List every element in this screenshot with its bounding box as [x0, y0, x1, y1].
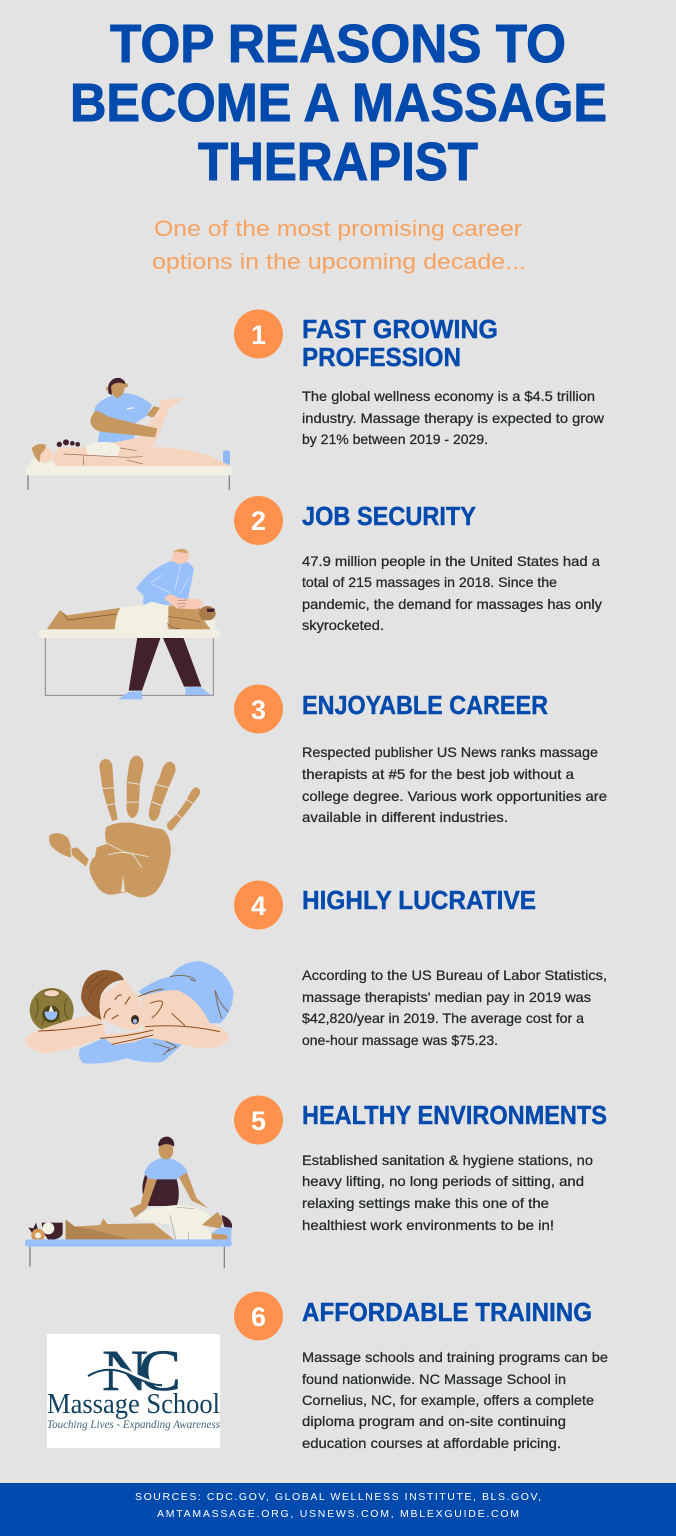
heading: highly lucrative: HIGHLY LUCRATIVE: [302, 887, 536, 915]
number badge 4: 4: [251, 891, 266, 921]
text: reason 4: one-hour massage was $75.23.: [302, 1033, 498, 1048]
number badge 2: 2: [251, 506, 266, 536]
text: reason 4: [302, 968, 607, 1048]
number badge 3: 3: [251, 695, 266, 725]
heading: healthy environments: HEALTHY ENVIRONMENTS: [302, 1102, 607, 1130]
heading: fast growing profession: PROFESSION: [302, 344, 461, 372]
text: reason 3: available in different industries.: [302, 810, 508, 825]
heading: job security: JOB SECURITY: [302, 503, 476, 531]
text: reason 5: healthiest work environments to be in!: [302, 1218, 554, 1233]
text: reason 6: education courses at affordable pricing.: [302, 1436, 561, 1451]
text: reason 5: heavy lifting, no long periods of sitting, and: [302, 1174, 584, 1189]
text: reason 6: Cornelius, NC, for example, offers a complete: [302, 1393, 594, 1408]
title: TOP REASONS TO: [110, 14, 566, 74]
illustration: handprint: [49, 756, 200, 897]
footer: sources: AMTAMASSAGE.ORG, USNEWS.COM, MBLEXGUIDE.COM: [157, 1508, 519, 1520]
text: reason 3: therapists at #5 for the best job without a: [302, 767, 574, 782]
text: reason 6: diploma program and on-site continuing: [302, 1414, 566, 1429]
number badge 4: [234, 880, 283, 930]
text: reason 2: [302, 554, 602, 633]
number badge 3: [234, 684, 283, 734]
illustration: therapist massaging client's back: [25, 1137, 232, 1268]
text: reason 6: [302, 1350, 608, 1451]
footer: sources: SOURCES: CDC.GOV, GLOBAL WELLNESS INSTITUTE, BLS.GOV,: [135, 1491, 541, 1503]
subtitle: [152, 216, 526, 274]
text: reason 5: relaxing settings make this one of the: [302, 1196, 549, 1211]
heading: fast growing profession: [302, 316, 498, 372]
text: reason 2: pandemic, the demand for massages has only: [302, 597, 602, 612]
number badge 2: [234, 496, 283, 545]
number badge 1: [234, 310, 283, 358]
heading: affordable training: AFFORDABLE TRAINING: [302, 1299, 592, 1327]
illustration: therapist massaging client's head: [39, 549, 220, 699]
text: reason 2: total of 215 massages in 2018. Since the: [302, 575, 557, 590]
text: reason 3: [302, 745, 607, 825]
text: reason 6: found nationwide. NC Massage School in: [302, 1372, 566, 1387]
number badge 5: [234, 1096, 283, 1144]
title: [70, 14, 607, 192]
logo: NC Massage School: Massage School: [47, 1389, 220, 1420]
number badge 1: 1: [251, 320, 266, 350]
number badge 6: [234, 1292, 283, 1340]
number badge 5: 5: [251, 1106, 266, 1136]
heading: fast growing profession: FAST GROWING: [302, 316, 498, 344]
number badge 6: 6: [251, 1302, 266, 1332]
text: reason 2: skyrocketed.: [302, 618, 384, 633]
text: reason 4: massage therapists' median pay in 2019 was: [302, 990, 591, 1005]
text: reason 6: Massage schools and training programs can be: [302, 1350, 608, 1365]
logo: NC Massage School: N: [102, 1338, 148, 1403]
text: reason 3: college degree. Various work opportunities are: [302, 789, 607, 804]
illustration: client relaxing with candle: [25, 961, 233, 1064]
text: reason 1: The global wellness economy is a $4.5 trillion: [302, 389, 595, 404]
text: reason 1: industry. Massage therapy is expected to grow: [302, 411, 604, 426]
text: reason 5: [302, 1153, 593, 1233]
text: reason 3: Respected publisher US News ranks massage: [302, 745, 598, 760]
logo: NC Massage School: Touching Lives - Expanding Awareness: [47, 1417, 220, 1431]
subtitle: One of the most promising career: [154, 216, 522, 241]
text: reason 2: 47.9 million people in the United States had a: [302, 554, 600, 569]
text: reason 4: $42,820/year in 2019. The average cost for a: [302, 1011, 584, 1026]
text: reason 5: Established sanitation & hygiene stations, no: [302, 1153, 593, 1168]
text: reason 1: by 21% between 2019 - 2029.: [302, 432, 488, 447]
subtitle: options in the upcoming decade...: [152, 249, 526, 274]
text: reason 1: [302, 389, 604, 447]
title: THERAPIST: [198, 132, 478, 192]
logo: NC Massage School: [47, 1334, 220, 1448]
text: reason 4: According to the US Bureau of Labor Statistics,: [302, 968, 607, 983]
illustration: therapist stretching client's leg: [25, 378, 233, 490]
title: BECOME A MASSAGE: [70, 73, 607, 133]
heading: enjoyable career: ENJOYABLE CAREER: [302, 692, 548, 720]
logo: NC Massage School: C: [139, 1338, 181, 1403]
footer: sources: [0, 1483, 676, 1536]
